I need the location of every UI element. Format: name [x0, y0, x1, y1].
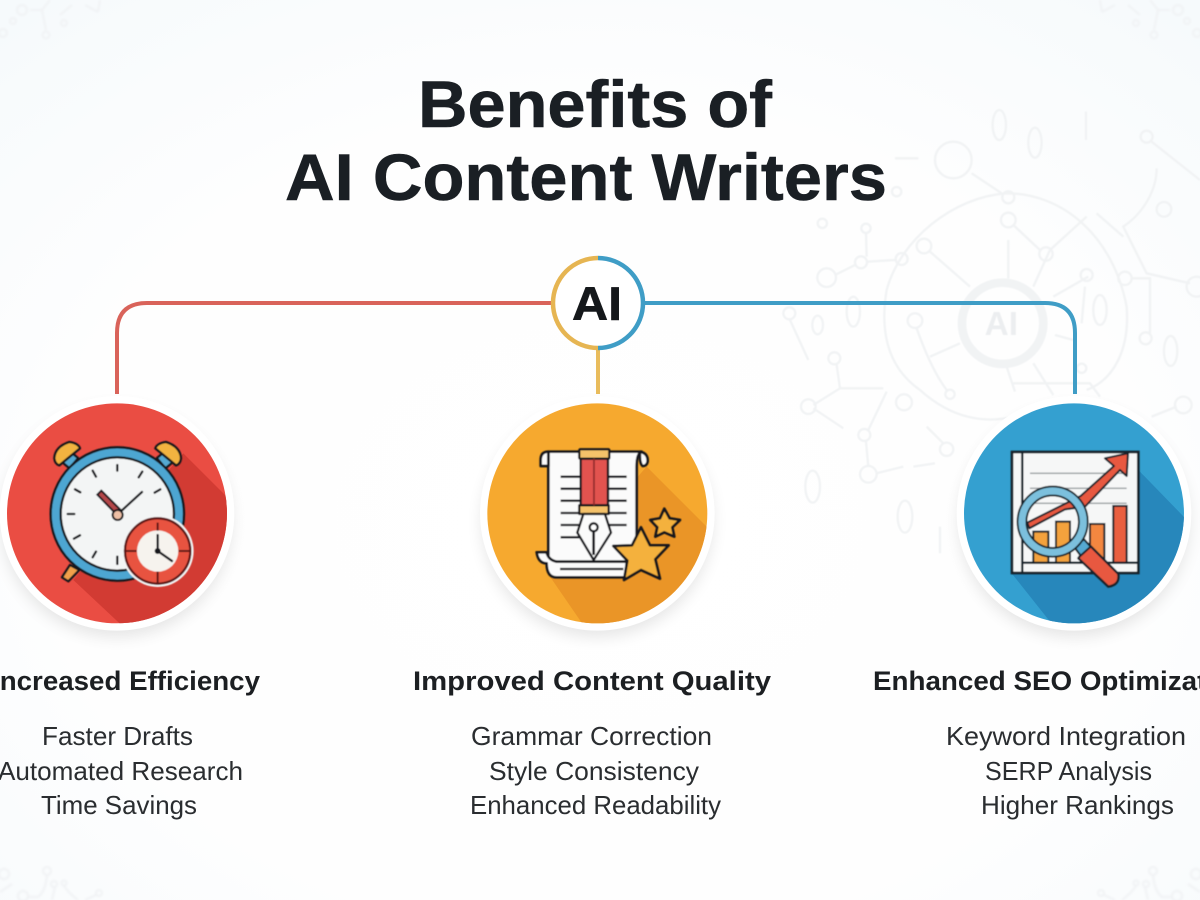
panel text: Improved Content Quality [413, 666, 771, 820]
title [285, 67, 887, 214]
corner ornament: top left [0, 0, 100, 38]
panel text: Increased Efficiency: Time Savings [41, 790, 197, 820]
corner ornament: bottom right [1098, 867, 1200, 900]
panel text: Increased Efficiency: Faster Drafts [42, 721, 193, 751]
icon: orange circle with scroll, pen and stars [480, 396, 720, 637]
panel text: Enhanced SEO Optimization: Keyword Integration [946, 721, 1186, 751]
connector: blue to Enhanced SEO Optimization [643, 303, 1075, 394]
panel text: Improved Content Quality: Style Consistency [489, 756, 699, 786]
panel text: Improved Content Quality: Grammar Correction [471, 721, 712, 751]
corner ornament: top right [1100, 0, 1200, 38]
panel text: Increased Efficiency: Automated Research [0, 756, 243, 786]
panel text: Enhanced SEO Optimization: Higher Rankings [981, 790, 1174, 820]
title: Benefits of [418, 67, 773, 141]
panel text: Improved Content Quality: Enhanced Readability [470, 790, 721, 820]
background network pattern: AI [985, 306, 1018, 343]
AI hub badge: AI [572, 277, 622, 330]
icon: red circle with alarm clock [0, 396, 240, 637]
panel text: Enhanced SEO Optimization [873, 666, 1200, 820]
title: AI Content Writers [285, 140, 887, 214]
connector: yellow to Improved Content Quality [596, 348, 600, 394]
AI hub badge [553, 258, 643, 348]
corner ornament: bottom left [0, 867, 102, 900]
panel text: Increased Efficiency [0, 666, 260, 820]
background network pattern [783, 110, 1200, 553]
icon: blue circle with chart and magnifier [957, 396, 1197, 637]
connector: red to Increased Efficiency [117, 303, 552, 394]
panel text: Improved Content Quality: Improved Content Quality [413, 666, 771, 696]
panel text: Enhanced SEO Optimization: SERP Analysis [985, 756, 1152, 786]
